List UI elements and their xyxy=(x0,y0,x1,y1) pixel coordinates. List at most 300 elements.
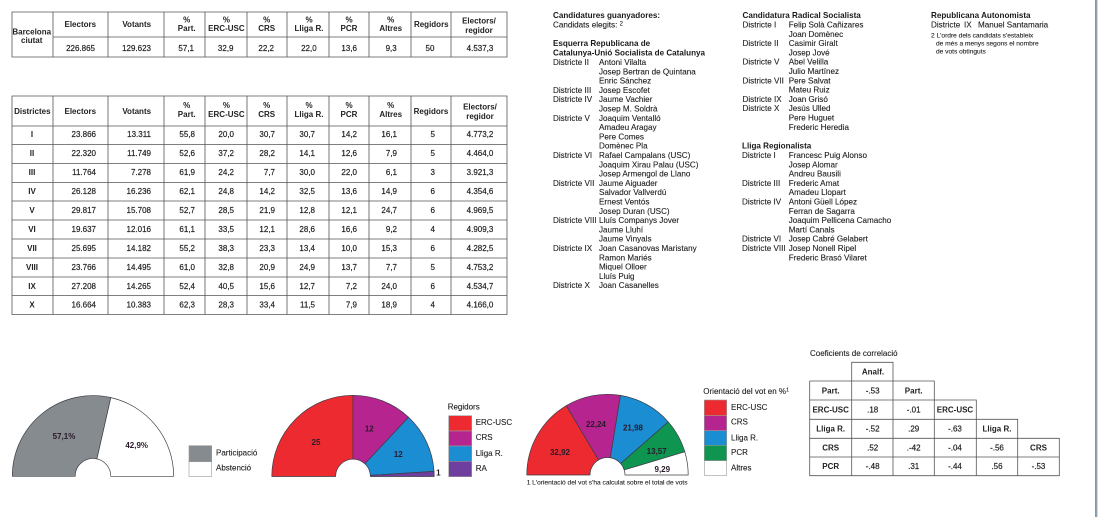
correlation row: Lliga R. xyxy=(816,425,962,434)
table row: district VI: 19.637 xyxy=(72,225,97,234)
right page edge xyxy=(1095,0,1098,517)
candidate list: Lliga Regionalista: Districte III xyxy=(742,179,780,188)
legend: vote orientation: Orientació del vot en % xyxy=(703,387,786,396)
table header: Barcelona ciutat: CRS xyxy=(258,24,276,33)
table header: Districtes: Electors xyxy=(65,107,97,116)
table row: district VI: 9,2 xyxy=(386,225,398,234)
table row: district I: 5 xyxy=(430,130,435,139)
candidate list: Lliga Regionalista: Districte VI xyxy=(742,235,781,244)
table row: district III: 7.278 xyxy=(131,168,152,177)
table row: district V: 29.817 xyxy=(72,206,97,215)
candidate list: Esquerra Republicana: Districte VIII xyxy=(553,216,597,225)
candidate list: Candidatura Radical Socialista xyxy=(742,11,863,132)
table row: district V: 12,1 xyxy=(341,206,358,215)
table row: district X: 4.166,0 xyxy=(467,301,494,310)
table row: district I: 23.866 xyxy=(72,130,97,139)
table row: district I xyxy=(31,130,494,139)
table row: district II: 7,9 xyxy=(386,149,398,158)
table row: district IX: 15,6 xyxy=(259,282,276,291)
candidate list: Lliga Regionalista: Lliga Regionalista xyxy=(742,142,812,151)
candidate list: Republicana Autonomista xyxy=(931,11,1049,30)
table row: district III: 22,0 xyxy=(341,168,358,177)
candidate list: Esquerra Republicana: Salvador Vallverdú xyxy=(599,188,666,197)
table header: Barcelona ciutat: Barcelona xyxy=(12,28,52,37)
correlation row: CRS: -.04 xyxy=(948,444,962,453)
table row: district X: 33,4 xyxy=(259,301,276,310)
table row: district VIII: 32,8 xyxy=(218,263,235,272)
candidate list: Esquerra Republicana: Ernest Ventós xyxy=(599,198,649,206)
candidate list: Lliga Regionalista: Josep Alomar xyxy=(789,160,838,169)
legend: regidors: Lliga R. xyxy=(476,449,503,458)
table row: district II: 22.320 xyxy=(72,149,97,158)
table: correlation coefficients xyxy=(810,362,1059,476)
text block: Candidatures guanyadores: Candidatures guanyadores: xyxy=(553,11,660,20)
table header: Barcelona ciutat: % xyxy=(223,16,230,25)
candidate list: Esquerra Republicana: Districte V xyxy=(553,114,590,123)
table row: district IX: 52,4 xyxy=(179,282,196,291)
table header: Districtes: % xyxy=(345,101,353,110)
candidate list: Lliga Regionalista: Districte I xyxy=(742,151,776,160)
table row: district II: 28,2 xyxy=(259,149,276,158)
legend: vote orientation: CRS xyxy=(731,418,748,427)
table row: district V: 12,8 xyxy=(299,206,316,215)
table row: district IX: IX xyxy=(28,282,36,291)
candidate list: Esquerra Republicana: Catalunya-Unió Socialista de Catalunya xyxy=(553,48,706,57)
table row: district II: 4.464,0 xyxy=(467,149,494,158)
candidate list: Esquerra Republicana: Pere Comes xyxy=(599,132,644,141)
candidate list: Candidatura Radical Socialista: Felip Solà Cañizares xyxy=(789,20,863,30)
candidate list: Esquerra Republicana: Districte X xyxy=(553,281,590,290)
candidate list: Esquerra Republicana: Josep Armengol de Llano xyxy=(599,170,691,179)
candidate list: Lliga Regionalista: Martí Canals xyxy=(789,225,835,234)
table row: district IV: 4.354,6 xyxy=(467,187,494,196)
table header: Barcelona ciutat: ERC-USC xyxy=(208,24,245,33)
correlation column headers: Lliga R. xyxy=(983,425,1011,434)
table row: district I: I xyxy=(31,130,33,139)
table header: Districtes: Regidors xyxy=(414,107,449,116)
chart: regidors semicircle: 12 xyxy=(365,425,374,434)
table header: Districtes: Votants xyxy=(122,107,152,116)
table row: district VII: 55,2 xyxy=(179,244,196,253)
candidate list: Esquerra Republicana: Joan Casanelles xyxy=(599,281,659,290)
table header: Barcelona ciutat: Part. xyxy=(178,24,196,33)
table row: district VI: 16,6 xyxy=(341,225,358,234)
table header: Districtes: Part. xyxy=(178,110,196,119)
chart: participation semicircle: 42,9% xyxy=(125,441,148,450)
candidate list: Esquerra Republicana: Josep Duran (USC) xyxy=(599,207,670,216)
footnote: vote orientation: 1 L'orientació del vot s'ha calculat sobre el total de vots xyxy=(527,480,688,487)
candidate list: Lliga Regionalista xyxy=(742,142,892,262)
table header: Districtes: regidor xyxy=(466,112,494,121)
candidate list: Esquerra Republicana: Domènec Pla xyxy=(599,142,648,151)
text block: Candidatures guanyadores xyxy=(553,11,660,30)
correlation row: PCR: -.53 xyxy=(1032,462,1046,471)
footnote: order of candidates xyxy=(931,32,1039,55)
candidate list: Candidatura Radical Socialista: Candidatura Radical Socialista xyxy=(742,11,861,20)
table row: district IV: 24,8 xyxy=(218,187,235,196)
table header: Barcelona ciutat: PCR xyxy=(341,24,358,33)
table row: district X: 28,3 xyxy=(218,301,235,310)
table: Barcelona ciutat xyxy=(12,12,507,57)
table row: district I: 14,2 xyxy=(341,130,358,139)
candidate list: Esquerra Republicana: Antoni Vilalta xyxy=(599,58,647,67)
candidate list: Candidatura Radical Socialista: Districte V xyxy=(742,58,780,67)
candidate list: Lliga Regionalista: Districte IV xyxy=(742,198,782,206)
candidate list: Republicana Autonomista: IX xyxy=(964,21,972,30)
table header: Barcelona ciutat xyxy=(12,16,497,45)
candidate list: Lliga Regionalista: Andreu Bausili xyxy=(789,170,841,179)
candidate list: Esquerra Republicana: Enric Sánchez xyxy=(599,77,651,86)
table row: district I: 55,8 xyxy=(179,130,196,139)
candidate list: Esquerra Republicana: Districte III xyxy=(553,86,591,95)
table row: district I: 13.311 xyxy=(127,130,152,139)
chart: regidors semicircle: 1 xyxy=(436,469,441,478)
table header: Districtes: % xyxy=(387,101,394,110)
footnote: order of candidates: de més a menys segons el nombre xyxy=(936,40,1039,47)
correlation row: CRS: CRS xyxy=(822,444,840,453)
legend: regidors: ERC-USC xyxy=(476,418,512,427)
candidate list: Candidatura Radical Socialista: Julio Martínez xyxy=(789,67,839,76)
table row: district VII: VII xyxy=(27,244,37,253)
table row: district II: 12,6 xyxy=(341,149,358,158)
table row: district V: 52,7 xyxy=(179,206,196,215)
chart: vote orientation semicircle: 32,92 xyxy=(550,448,571,457)
table header: Districtes: Altres xyxy=(379,110,403,119)
table header: Barcelona ciutat: % xyxy=(345,16,353,25)
candidate list: Lliga Regionalista: Frederic Amat xyxy=(789,179,840,188)
table row: district X: 18,9 xyxy=(381,301,398,310)
table row: district VII: 13,4 xyxy=(299,244,316,253)
candidate list: Lliga Regionalista: Frederic Brasó Vilaret xyxy=(789,253,868,262)
table row: district II: 5 xyxy=(430,149,435,158)
legend: regidors: Regidors xyxy=(448,403,480,412)
table row: district X: 10.383 xyxy=(127,301,152,310)
table row: district IV: 32,5 xyxy=(299,187,316,196)
candidate list: Candidatura Radical Socialista: Pere Huguet xyxy=(789,114,835,122)
table row: city totals: 32,9 xyxy=(218,44,234,53)
table row: district II: 11.749 xyxy=(127,149,152,158)
table header: Barcelona ciutat: Lliga R. xyxy=(295,24,323,33)
chart: vote orientation semicircle: 13,57 xyxy=(647,447,667,456)
table header: Districtes: % xyxy=(305,101,313,110)
candidate list: Candidatura Radical Socialista: Districte VII xyxy=(742,76,784,85)
table row: district IV: 14,2 xyxy=(259,187,276,196)
candidate list: Candidatura Radical Socialista: Joan Grisó xyxy=(789,95,828,104)
candidate list: Candidatura Radical Socialista: Districte X xyxy=(742,104,780,113)
table row: city totals: 9,3 xyxy=(386,44,397,53)
table row: district VIII: 24,9 xyxy=(299,263,316,272)
table row: district IX: 6 xyxy=(430,282,435,291)
candidate list: Candidatura Radical Socialista: Casimir Giralt xyxy=(789,39,838,48)
table header: Districtes: % xyxy=(183,101,190,110)
table header: Districtes: PCR xyxy=(341,110,358,119)
candidate list: Candidatura Radical Socialista: Mateu Ruiz xyxy=(789,86,830,95)
correlation row: Lliga R.: Lliga R. xyxy=(816,425,845,434)
correlation row: PCR: PCR xyxy=(822,462,839,471)
table row: city totals: 22,0 xyxy=(301,44,317,53)
table row: district IX: 24,0 xyxy=(381,282,398,291)
table row: district VI: 12.016 xyxy=(127,225,152,234)
candidate list: Republicana Autonomista: Manuel Santamaria xyxy=(978,21,1049,30)
table header: Barcelona ciutat: % xyxy=(183,16,190,25)
candidate list: Candidatura Radical Socialista: Josep Jové xyxy=(789,48,830,57)
table header: Barcelona ciutat: Electors/ xyxy=(462,17,497,26)
table row: district VIII xyxy=(26,263,494,272)
candidate list: Candidatura Radical Socialista: Districte IX xyxy=(742,95,782,104)
table row: district X: 11,5 xyxy=(300,301,316,310)
table row: district V: 6 xyxy=(430,206,435,215)
table row: district VIII: VIII xyxy=(26,263,38,272)
legend: participation: Abstenció xyxy=(216,464,252,473)
table row: district III: 24,2 xyxy=(218,168,235,177)
table row: district VII: 23,3 xyxy=(259,244,276,253)
candidate list: Esquerra Republicana: Joaquim Xirau Palau (USC) xyxy=(599,160,699,169)
correlation row: PCR: -.44 xyxy=(948,462,962,471)
table row: district VIII: 13,7 xyxy=(341,263,358,272)
table header: Barcelona ciutat: % xyxy=(263,16,270,25)
table row: district VII: 38,3 xyxy=(218,244,235,253)
table header: Districtes: % xyxy=(223,101,230,110)
candidate list: Esquerra Republicana: Jaume Vachier xyxy=(599,95,653,104)
candidate list: Esquerra Republicana: Joan Casanovas Maristany xyxy=(599,244,698,253)
candidate list: Candidatura Radical Socialista: Frederic Heredia xyxy=(789,123,849,132)
correlation row: CRS: -.56 xyxy=(990,444,1004,453)
table row: district III: 3 xyxy=(430,168,435,177)
candidate list: Republicana Autonomista: Republicana Autonomista xyxy=(931,11,1031,20)
table row: district VII: 4.282,5 xyxy=(467,244,494,253)
table row: district I: 30,7 xyxy=(259,130,276,139)
table row: district II: 37,2 xyxy=(218,149,235,158)
correlation row: ERC-USC: -.01 xyxy=(907,406,921,415)
candidate list: Esquerra Republicana: Lluís Companys Jover xyxy=(599,216,679,225)
table row: district IX: 12,7 xyxy=(299,282,316,291)
table row: district IV: 6 xyxy=(430,187,435,196)
table row: district I: 30,7 xyxy=(299,130,316,139)
correlation row: Part. xyxy=(822,387,880,396)
table row: district II: II xyxy=(30,149,34,158)
table header: Barcelona ciutat: regidor xyxy=(465,26,493,35)
table row: district V: 28,5 xyxy=(218,206,235,215)
candidate list: Esquerra Republicana: Districte IV xyxy=(553,95,593,104)
table row: district VIII: 14.495 xyxy=(127,263,152,272)
table row: district I: 16,1 xyxy=(381,130,398,139)
table row: district IV: 26.128 xyxy=(72,187,97,196)
candidate list: Candidatura Radical Socialista: Abel Velilla xyxy=(789,58,829,67)
heading: correlation coefficients: Coeficients de correlació xyxy=(810,349,898,358)
correlation column headers: CRS xyxy=(1030,444,1048,453)
table row: district V: 15.708 xyxy=(127,206,152,215)
table row: district II: 14,1 xyxy=(299,149,316,158)
table row: district IX: 4.534,7 xyxy=(467,282,494,291)
table row: city totals: 13,6 xyxy=(341,44,358,53)
candidate list: Lliga Regionalista: Amadeu Llopart xyxy=(789,188,847,197)
table row: district I: 20,0 xyxy=(218,130,235,139)
table row: district VII: 6 xyxy=(430,244,435,253)
table row: district IV: 14,9 xyxy=(381,187,398,196)
table row: district III: 7,7 xyxy=(264,168,276,177)
table row: city totals: 4.537,3 xyxy=(467,44,494,53)
footnote: order of candidates: de vots obtinguts xyxy=(936,48,987,55)
table row: district V xyxy=(29,206,494,215)
table row: district VIII: 4.753,2 xyxy=(467,263,494,272)
chart: vote orientation semicircle: 22,24 xyxy=(586,420,607,429)
candidate list: Esquerra Republicana: Ramon Mariés xyxy=(599,253,652,262)
footnote: order of candidates: 2 L'ordre dels candidats s'estableix xyxy=(931,32,1034,39)
table row: city totals: 57,1 xyxy=(178,44,195,53)
candidate list: Esquerra Republicana: Jaume Aiguader xyxy=(599,179,658,188)
correlation row: CRS: .-42 xyxy=(907,444,921,453)
table row: district VI: 28,6 xyxy=(299,225,316,234)
candidate list: Lliga Regionalista: Districte VIII xyxy=(742,244,786,253)
correlation row: Lliga R.: .29 xyxy=(908,425,920,434)
correlation row: Part.: -.53 xyxy=(866,387,880,396)
candidate list: Lliga Regionalista: Joaquim Pellicena Camacho xyxy=(789,216,892,225)
table row: district II xyxy=(30,149,494,158)
candidate list: Candidatura Radical Socialista: Pere Salvat xyxy=(789,76,831,85)
table row: city totals: 22,2 xyxy=(258,44,275,53)
table row: district VIII: 7,7 xyxy=(386,263,398,272)
table row: district X: 7,9 xyxy=(346,301,358,310)
correlation row: CRS: .52 xyxy=(867,444,879,453)
table row: district VIII: 20,9 xyxy=(259,263,276,272)
correlation row: PCR: .31 xyxy=(908,462,920,471)
candidate list: Candidatura Radical Socialista: Districte II xyxy=(742,39,778,48)
table row: district X: X xyxy=(29,301,35,310)
correlation row: ERC-USC: ERC-USC xyxy=(812,406,849,415)
table row: district V: 24,7 xyxy=(381,206,398,215)
table row: district III xyxy=(29,168,494,177)
candidate list: Esquerra Republicana: Lluís Puig xyxy=(599,272,635,281)
candidate list: Lliga Regionalista: Josep Cabré Gelabert xyxy=(789,235,869,244)
candidate list: Esquerra Republicana: Josep Bertran de Quintana xyxy=(599,67,696,76)
table row: district VI: VI xyxy=(28,225,36,234)
table row: city totals: 50 xyxy=(426,44,435,53)
candidate list: Esquerra Republicana: Josep Escofet xyxy=(599,86,651,95)
legend: vote orientation: PCR xyxy=(731,448,748,457)
table row: district V: V xyxy=(29,206,35,215)
candidate list: Esquerra Republicana: Rafael Campalans (USC) xyxy=(599,151,691,160)
table header: Barcelona ciutat: Electors xyxy=(65,20,97,29)
table row: district IX: 27.208 xyxy=(72,282,97,291)
table row: district I: 4.773,2 xyxy=(467,130,494,139)
table row: district IV: IV xyxy=(28,187,36,196)
table row: district III: 30,0 xyxy=(299,168,316,177)
candidate list: Candidatura Radical Socialista: Districte I xyxy=(742,20,776,30)
table header: Districtes: Lliga R. xyxy=(295,110,323,119)
table header: Barcelona ciutat: Regidors xyxy=(414,20,449,29)
legend: participation xyxy=(189,446,258,476)
candidate list: Candidatura Radical Socialista: Jesús Ulled xyxy=(789,104,831,113)
legend: regidors: CRS xyxy=(476,433,493,442)
table row: district IV: 16.236 xyxy=(127,187,152,196)
correlation row: CRS xyxy=(822,444,1004,453)
candidate list: Esquerra Republicana: Miquel Olloer xyxy=(599,263,647,272)
chart: regidors semicircle: 25 xyxy=(312,438,321,447)
table row: district VIII: 23.766 xyxy=(72,263,97,272)
correlation column headers: Part. xyxy=(905,387,923,396)
chart: vote orientation semicircle: 9,29 xyxy=(655,465,671,474)
table row: district III: 6,1 xyxy=(386,168,398,177)
candidate list: Lliga Regionalista: Josep Nonell Ripel xyxy=(789,244,856,253)
table row: district IX: 7,2 xyxy=(346,282,358,291)
correlation row: ERC-USC xyxy=(812,406,921,415)
table row: district VIII: 5 xyxy=(430,263,435,272)
legend: vote orientation: Lliga R. xyxy=(731,434,758,443)
table row: district V: 21,9 xyxy=(259,206,276,215)
correlation row: PCR: -.48 xyxy=(866,462,880,471)
table row: district X: 62,3 xyxy=(179,301,196,310)
candidate list: Esquerra Republicana: Districte VI xyxy=(553,151,592,160)
table row: district VII: 15,3 xyxy=(381,244,398,253)
table row: city totals xyxy=(66,44,494,53)
candidate list: Esquerra Republicana xyxy=(553,39,706,290)
table row: district V: 4.969,5 xyxy=(467,206,494,215)
table row: district VI: 4.909,3 xyxy=(467,225,494,234)
correlation row: PCR: .56 xyxy=(991,462,1003,471)
table row: district III: III xyxy=(29,168,35,177)
correlation row: Part.: Part. xyxy=(822,387,840,396)
table row: district III: 61,9 xyxy=(179,168,196,177)
table header: Districtes: Electors/ xyxy=(463,103,498,112)
table row: district IV: 13,6 xyxy=(341,187,358,196)
table header: Barcelona ciutat: Altres xyxy=(379,24,403,33)
chart: regidors semicircle: 12 xyxy=(394,450,403,459)
candidate list: Candidatura Radical Socialista: Joan Domènec xyxy=(789,30,843,39)
table row: district VI: 4 xyxy=(430,225,435,234)
table row: district VIII: 61,0 xyxy=(179,263,196,272)
table row: district IX: 40,5 xyxy=(218,282,235,291)
table row: district VI: 33,5 xyxy=(218,225,235,234)
table row: district VI xyxy=(28,225,494,234)
candidate list: Lliga Regionalista: Francesc Puig Alonso xyxy=(789,151,867,160)
table row: district VII: 25.695 xyxy=(72,244,97,253)
table row: district II: 52,6 xyxy=(179,149,196,158)
candidate list: Esquerra Republicana: Amadeu Aragay xyxy=(599,123,658,132)
table row: district IV xyxy=(28,187,494,196)
correlation column headers xyxy=(862,368,1048,453)
chart: regidors semicircle xyxy=(272,395,441,478)
table row: district VII: 14.182 xyxy=(127,244,152,253)
legend: vote orientation: ERC-USC xyxy=(731,403,768,412)
table row: district X: 4 xyxy=(430,301,435,310)
chart: participation semicircle: 57,1% xyxy=(53,432,75,441)
candidate list: Esquerra Republicana: Josep M. Soldrà xyxy=(599,104,658,114)
legend: participation: Participació xyxy=(216,449,258,458)
table header: Barcelona ciutat: % xyxy=(387,16,394,25)
correlation row: PCR xyxy=(822,462,1046,471)
table row: district III: 3.921,3 xyxy=(467,168,494,177)
table row: district IX xyxy=(28,282,494,291)
legend: vote orientation: Altres xyxy=(731,464,751,473)
table row: district IX: 14.265 xyxy=(127,282,152,291)
table row: district X: 16.664 xyxy=(72,301,97,310)
chart: vote orientation semicircle xyxy=(527,394,688,475)
table row: city totals: 226.865 xyxy=(66,44,96,53)
table header: Districtes: % xyxy=(263,101,270,110)
candidate list: Esquerra Republicana: Districte II xyxy=(553,58,589,67)
table header: Districtes: Districtes xyxy=(14,107,51,116)
legend: regidors: RA xyxy=(476,464,487,473)
candidate list: Republicana Autonomista: Districte xyxy=(931,21,961,30)
table row: district IV: 62,1 xyxy=(179,187,196,196)
candidate list: Esquerra Republicana: Esquerra Republicana de xyxy=(553,39,651,48)
chart: vote orientation semicircle: 21,98 xyxy=(623,424,644,433)
legend: regidors xyxy=(448,403,512,477)
text block: Candidatures guanyadores: Candidats elegits: xyxy=(553,20,617,30)
correlation row: ERC-USC: .18 xyxy=(867,406,879,415)
chart: participation semicircle xyxy=(12,396,174,476)
table header: Districtes: CRS xyxy=(258,110,276,119)
